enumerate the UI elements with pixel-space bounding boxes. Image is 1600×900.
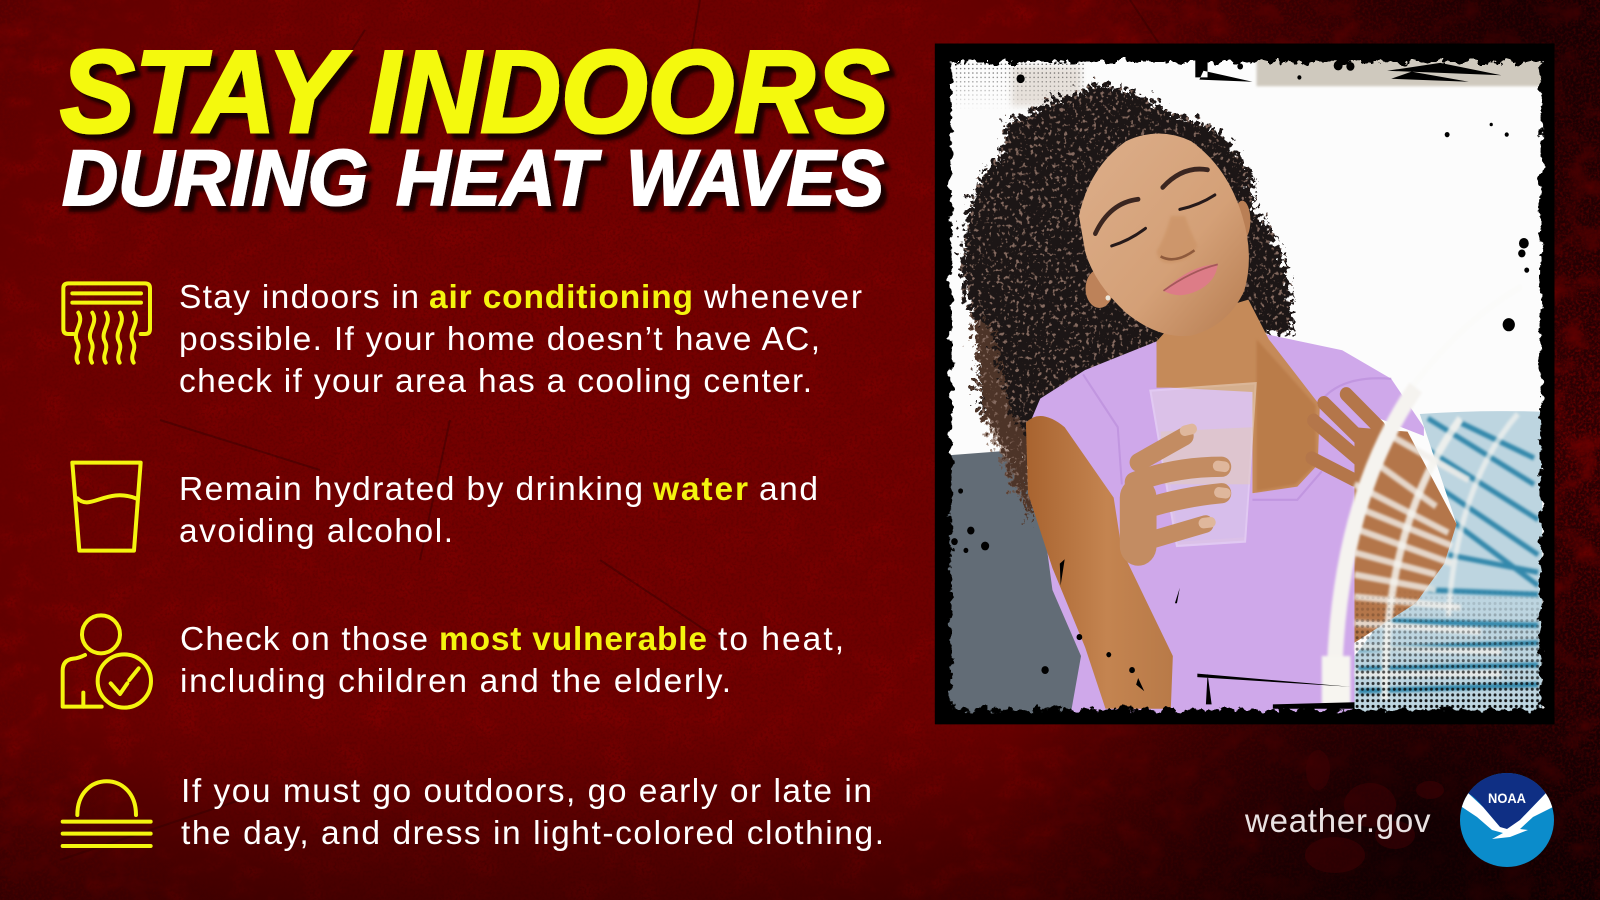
icon: sun on horizon <box>63 781 151 846</box>
woman's left arm <box>1026 416 1173 709</box>
tip 4: going outdoors <box>63 773 884 852</box>
icon: person with check mark <box>63 615 151 708</box>
tip 3: check on the vulnerable <box>63 615 844 708</box>
text: air conditioning tip: air conditioning <box>429 279 693 316</box>
wall and window background <box>942 53 1550 713</box>
text: air conditioning tip <box>179 279 862 400</box>
title line 1: INDOORS <box>369 26 889 157</box>
raised hand on chest <box>1312 394 1457 643</box>
splatter specks <box>951 58 1529 709</box>
text: air conditioning tip: check if your area has a cooling center. <box>179 363 812 400</box>
icon: air conditioner <box>63 283 150 363</box>
halftone overlays <box>954 62 1542 713</box>
lips <box>1163 264 1218 295</box>
shirt seam details <box>1083 374 1391 500</box>
NOAA logo <box>1460 773 1554 867</box>
blue cushion <box>1354 411 1542 713</box>
photo panel: woman with water and fan <box>934 44 1554 724</box>
weather.gov link text: weather.gov <box>1244 802 1432 839</box>
text: hydration tip: water <box>652 471 748 508</box>
text: hydration tip: Remain hydrated by drinking <box>179 471 643 508</box>
closed eyes <box>1112 195 1215 246</box>
text: outdoors tip: If you must go outdoors, go early or late in <box>181 773 872 810</box>
glass of water <box>1150 383 1256 546</box>
text: outdoors tip <box>181 773 884 852</box>
electric fan <box>1322 286 1522 704</box>
text: air conditioning tip: Stay indoors in <box>179 279 419 316</box>
sofa <box>942 451 1093 713</box>
text: outdoors tip: the day, and dress in light-colored clothing. <box>181 815 884 852</box>
hand holding the glass <box>1132 429 1226 546</box>
eyebrows <box>1095 169 1208 234</box>
title line 1: STAY <box>60 26 351 157</box>
title <box>60 26 889 222</box>
lavender shirt <box>1030 334 1424 713</box>
title line 2: HEAT <box>396 133 601 222</box>
title line 2: WAVES <box>626 133 884 222</box>
tip 2: hydration <box>72 463 818 551</box>
text: vulnerable tip: to heat, <box>718 621 844 658</box>
NOAA logo: NOAA <box>1488 790 1526 806</box>
chest skin behind neckline <box>1157 300 1320 493</box>
head and face <box>1079 134 1250 336</box>
text: hydration tip <box>179 471 818 550</box>
icon: glass of water <box>72 463 141 551</box>
text: vulnerable tip: Check on those <box>180 621 428 658</box>
hair <box>957 77 1288 520</box>
face shape <box>1079 134 1249 336</box>
nose <box>1157 216 1197 263</box>
ear <box>1086 269 1113 308</box>
text: hydration tip: and <box>759 471 818 508</box>
text: hydration tip: avoiding alcohol. <box>179 513 453 550</box>
distressed black frame <box>934 44 1554 724</box>
text: vulnerable tip <box>180 621 844 700</box>
text: air conditioning tip: possible. If your home doesn’t have AC, <box>179 321 820 358</box>
tip 1: air conditioning <box>63 279 862 400</box>
text: vulnerable tip: including children and the elderly. <box>180 663 731 700</box>
text: vulnerable tip: most vulnerable <box>439 621 707 658</box>
text: air conditioning tip: whenever <box>703 279 862 316</box>
title line 2: DURING <box>62 133 368 222</box>
